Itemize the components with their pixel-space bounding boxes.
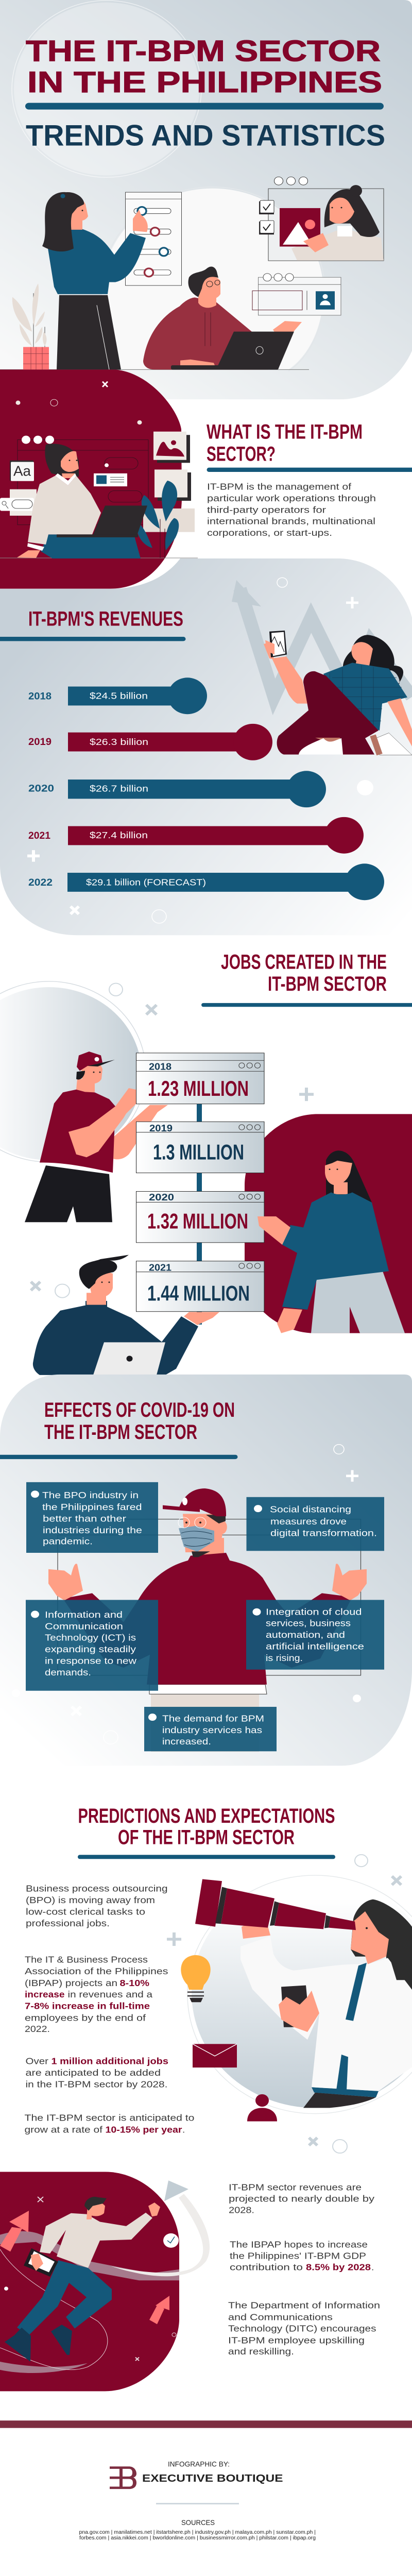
text block: IBPAP projection: in revenues and a <box>68 1989 153 1999</box>
sources heading: SOURCES <box>181 2519 215 2527</box>
callout: BPO fared better: pandemic. <box>43 1536 93 1547</box>
divider <box>156 2503 239 2504</box>
text block: additional jobs: 1 million additional jobs <box>52 2056 168 2066</box>
illustration: woman at laptop on maroon shape <box>0 369 198 589</box>
text block: upskilling: and Communications <box>228 2312 333 2322</box>
card: 2020 <box>136 1191 264 1243</box>
illustration: video call window <box>259 177 384 261</box>
text block: revenues double <box>229 2182 375 2215</box>
text block: BPO moving <box>26 1883 168 1928</box>
heading: covid: EFFECTS OF COVID-19 ON <box>44 1398 235 1421</box>
callout: social distancing: Social distancing <box>270 1504 351 1514</box>
panel: jobs created <box>0 950 412 1375</box>
illustration: man with cap <box>25 1052 168 1222</box>
text block: additional jobs: in the IT-BPM sector by 2028. <box>25 2079 167 2089</box>
text block: GDP contribution: contribution to <box>230 2262 303 2273</box>
sources list: pna.gov.com | manilatimes.net | itstartshere.ph | industry.gov.ph | malaya.com.ph | sunstar.com.ph | <box>79 2530 316 2535</box>
text block: upskilling <box>228 2300 380 2357</box>
callout: cloud integration: artificial intelligence <box>266 1641 364 1651</box>
callout: cloud integration <box>246 1600 384 1670</box>
callout: ICT expanding: expanding steadily <box>45 1644 136 1654</box>
bar: 2022 <box>28 863 384 900</box>
text block: definition: international brands, multinational <box>207 516 375 527</box>
callout: ICT expanding: in response to new <box>45 1655 137 1666</box>
sources list <box>79 2530 316 2541</box>
illustration: woman with sliders <box>42 192 148 369</box>
text block: definition: particular work operations through <box>207 493 376 503</box>
illustration: woman with telescope <box>167 1855 412 2153</box>
text block: growth rate: 10-15% per year <box>105 2124 182 2134</box>
footer: credit and sources <box>79 2461 316 2541</box>
panel: header background <box>0 0 412 399</box>
credit line: INFOGRAPHIC BY: <box>168 2461 230 2468</box>
icon: potted plant <box>12 283 49 369</box>
bar: 2019: 2019 <box>28 736 52 748</box>
text block: growth rate: . <box>182 2124 185 2134</box>
text block: IBPAP projection: 2022. <box>25 2024 50 2034</box>
callout: BPO fared better: The BPO industry in <box>42 1490 139 1500</box>
callout: demand for BPM <box>144 1707 277 1751</box>
callout: social distancing: measures drove <box>270 1516 347 1527</box>
heading: covid: THE IT-BPM SECTOR <box>44 1420 197 1444</box>
text block: BPO moving: Business process outsourcing <box>26 1883 168 1894</box>
text block: GDP contribution: 8.5% by 2028 <box>306 2262 371 2273</box>
footer divider band <box>0 2420 412 2428</box>
text block: upskilling: and reskilling. <box>228 2346 294 2357</box>
text block: IBPAP projection: employees by the end of <box>25 2012 146 2023</box>
illustration: man with laptop <box>143 267 302 369</box>
card: 2019 <box>136 1122 264 1173</box>
icon: slider panel <box>125 192 181 285</box>
callout: social distancing <box>246 1497 384 1551</box>
panel: future outlook <box>0 2172 380 2391</box>
text block: definition: IT-BPM is the management of <box>207 481 352 492</box>
text block: IBPAP projection: The IT & Business Process <box>25 1954 148 1965</box>
text block: growth rate <box>24 2112 194 2134</box>
callout: cloud integration: automation, and <box>266 1630 345 1640</box>
callout: ICT expanding: Technology (ICT) is <box>45 1632 136 1643</box>
illustration: man with laptop <box>33 1255 219 1375</box>
text block: additional jobs <box>25 2056 168 2089</box>
text block: IBPAP projection <box>25 1954 168 2034</box>
text block: growth rate: grow at a rate of <box>24 2124 103 2134</box>
logo: executive boutique <box>110 2466 283 2489</box>
callout: demand for BPM: increased. <box>162 1736 211 1747</box>
heading: jobs created <box>201 950 412 1007</box>
icon: person <box>247 2094 277 2122</box>
background shapes <box>0 981 412 1333</box>
callout: cloud integration: services, business <box>266 1618 351 1629</box>
card: 2019: 1.3 MILLION <box>153 1141 244 1164</box>
illustration: running man on maroon shape <box>0 2172 210 2391</box>
bar: 2022: $29.1 billion (FORECAST) <box>86 877 206 887</box>
text block: IBPAP projection: 7-8% increase in full-time <box>25 2001 150 2011</box>
heading: predictions <box>78 1804 335 1859</box>
callout: ICT expanding: demands. <box>45 1667 91 1677</box>
callout: BPO fared better: industries during the <box>43 1525 142 1535</box>
text block: additional jobs: are anticipated to be added <box>25 2067 161 2078</box>
bar: 2018: $24.5 billion <box>90 690 148 701</box>
bar: 2019 <box>28 724 272 760</box>
callout: demand for BPM: industry services has <box>162 1724 262 1735</box>
text block: definition: third-party operators for <box>207 504 326 515</box>
callout: cloud integration: Integration of cloud <box>266 1606 362 1617</box>
icon: envelope <box>193 2044 237 2067</box>
panel: effects of covid-19 <box>0 1375 412 1766</box>
icon: light bulb <box>181 1955 211 2002</box>
text block: GDP contribution: . <box>371 2262 374 2273</box>
bar: 2018: 2018 <box>28 691 52 702</box>
callout: BPO fared better: better than other <box>43 1513 126 1523</box>
text block: revenues double: 2028. <box>229 2205 254 2215</box>
text block: BPO moving: low-cost clerical tasks to <box>26 1906 145 1917</box>
text block: additional jobs: Over <box>25 2056 48 2066</box>
card: 2018: 1.23 MILLION <box>148 1077 249 1101</box>
bar: 2021 <box>28 817 364 854</box>
text block: upskilling: The Department of Information <box>228 2300 380 2310</box>
text block: IBPAP projection: Association of the Philippines <box>25 1966 168 1976</box>
text block: GDP contribution <box>230 2239 374 2273</box>
bar: 2020: $26.7 billion <box>90 783 148 793</box>
bar: 2020: 2020 <box>28 783 54 794</box>
bar: 2021: 2021 <box>28 830 50 841</box>
bar: 2021: $27.4 billion <box>90 829 148 840</box>
text block: GDP contribution: The IBPAP hopes to increase <box>230 2239 368 2249</box>
text block: definition: corporations, or start-ups. <box>207 528 332 538</box>
callout: cloud integration: is rising. <box>266 1652 303 1663</box>
callout: ICT expanding: Information and <box>45 1609 123 1620</box>
illustration: woman in blue sweater <box>258 1150 405 1333</box>
callout: social distancing: digital transformation. <box>270 1528 377 1538</box>
panel: revenues background <box>0 558 412 935</box>
heading: predictions: OF THE IT-BPM SECTOR <box>118 1825 295 1849</box>
text block: definition <box>207 481 376 538</box>
text block: IBPAP projection: increase <box>25 1989 65 1999</box>
panel: predictions and expectations <box>24 1804 412 2153</box>
card: 2021 <box>136 1261 264 1312</box>
heading: what is the IT-BPM sector: SECTOR? <box>207 442 276 465</box>
card: 2020: 2020 <box>149 1192 174 1203</box>
text block: revenues double: projected to nearly double by <box>229 2193 375 2204</box>
card: 2020: 1.32 MILLION <box>147 1210 248 1233</box>
bar: 2020 <box>28 771 326 807</box>
heading: revenues: IT-BPM'S REVENUES <box>28 607 183 630</box>
callout: BPO fared better <box>26 1482 158 1553</box>
text block: GDP contribution: the Philippines' IT-BPM GDP <box>230 2250 366 2261</box>
heading: what is the IT-BPM sector <box>207 420 412 472</box>
bar: 2022: 2022 <box>28 877 53 888</box>
logo: executive boutique: EXECUTIVE BOUTIQUE <box>142 2472 283 2484</box>
icon: profile window <box>252 274 341 315</box>
callout: demand for BPM: The demand for BPM <box>162 1713 264 1723</box>
text block: BPO moving: (BPO) is moving away from <box>26 1895 155 1905</box>
chart: revenue bars <box>28 677 384 900</box>
text block: growth rate: The IT-BPM sector is anticipated to <box>24 2112 194 2123</box>
title: THE IT-BPM SECTOR <box>26 34 381 67</box>
text block: upskilling: Technology (DITC) encourages <box>228 2323 376 2334</box>
panel: what is the IT-BPM sector <box>0 369 412 589</box>
text block: BPO moving: professional jobs. <box>26 1918 110 1928</box>
title: IN THE PHILIPPINES <box>27 65 382 99</box>
sources list: forbes.com | asia.nikkei.com | bworldonline.com | businessmirror.com.ph | philstar.com | ibpap.org <box>79 2535 316 2541</box>
illustration: woman at laptop on maroon shape: Aa <box>13 463 31 479</box>
bar: 2018 <box>28 677 207 714</box>
text block: IBPAP projection: 8-10% <box>119 1978 149 1988</box>
card: 2018: 2018 <box>149 1061 171 1072</box>
heading: revenues <box>0 607 185 641</box>
timeline stem <box>197 1104 202 1325</box>
callout: BPO fared better: the Philippines fared <box>42 1502 142 1512</box>
bar: 2019: $26.3 billion <box>90 736 148 747</box>
card: 2018 <box>136 1053 264 1104</box>
text block: revenues double: IT-BPM sector revenues are <box>229 2182 362 2192</box>
card: 2021: 1.44 MILLION <box>147 1282 250 1306</box>
callout: ICT expanding: Communication <box>45 1621 123 1631</box>
illustration: woman sitting with phone <box>264 631 412 755</box>
card: 2021: 2021 <box>149 1262 171 1273</box>
text block: IBPAP projection: (IBPAP) projects an <box>25 1978 117 1988</box>
title <box>25 34 385 152</box>
heading: covid <box>0 1398 238 1459</box>
callout: ICT expanding <box>26 1600 158 1691</box>
illustration: team working with digital interfaces <box>0 177 384 371</box>
text block: upskilling: IT-BPM employee upskilling <box>228 2335 365 2345</box>
illustration: masked man holding frame <box>48 1488 367 1752</box>
card: 2019: 2019 <box>149 1123 173 1134</box>
